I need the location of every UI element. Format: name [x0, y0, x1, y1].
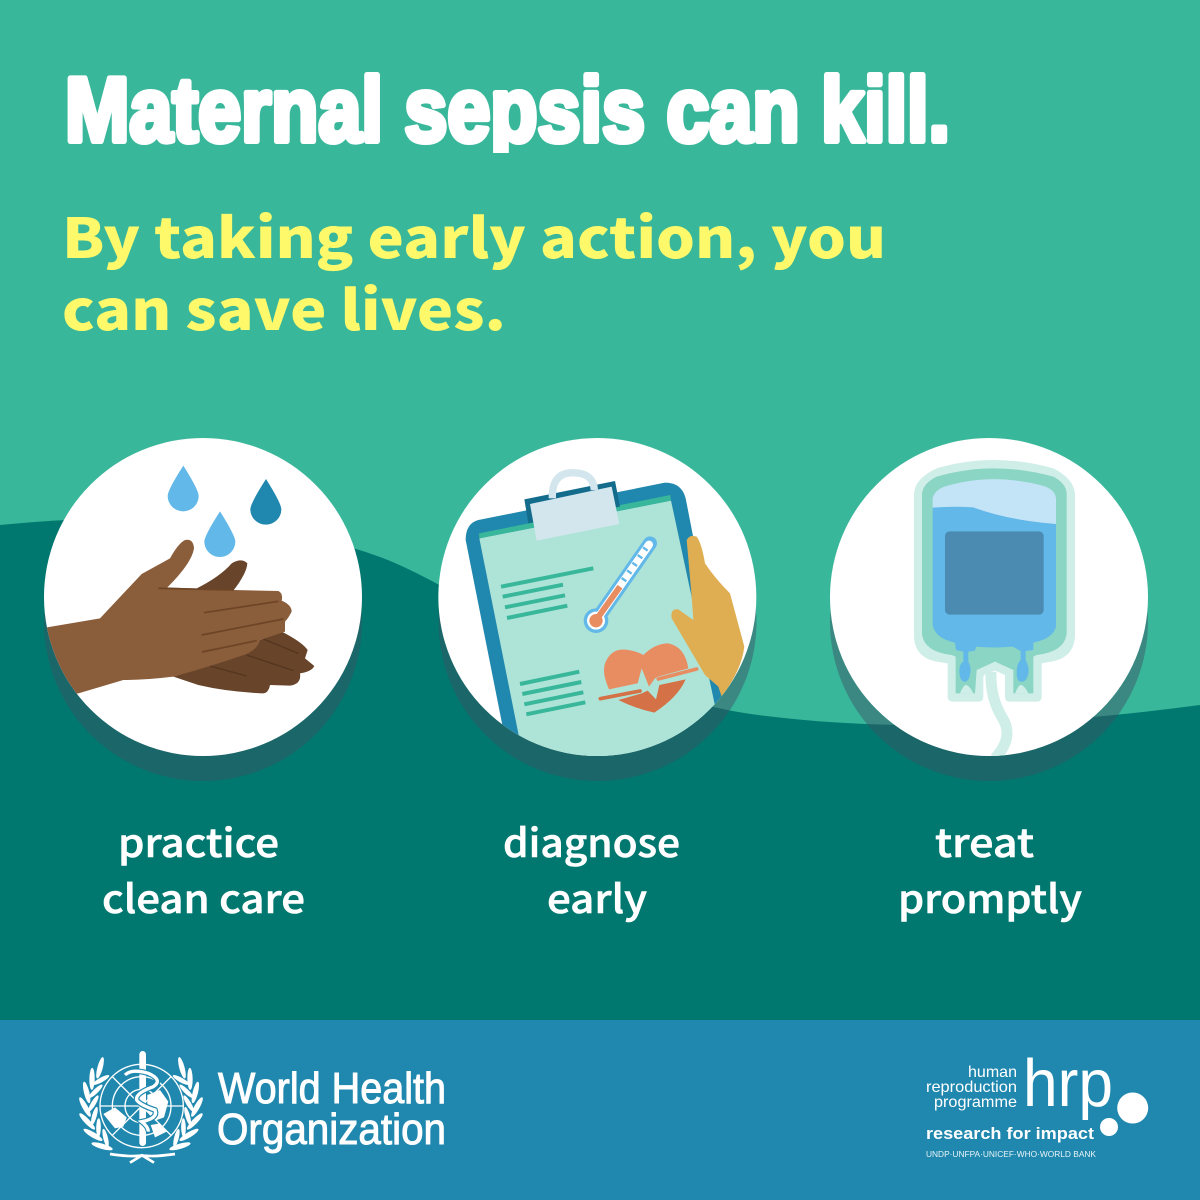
- label: treat promptly: treat: [935, 813, 1034, 869]
- laurel wreath: [77, 1056, 205, 1163]
- icon: washing hands: [43, 540, 314, 697]
- globe: [100, 1064, 183, 1148]
- title: Maternal sepsis can kill.: [65, 60, 950, 161]
- label: diagnose early: early: [547, 869, 647, 925]
- logo text: World Health Organization: [217, 1064, 446, 1154]
- icon: clipboard: [466, 473, 725, 763]
- logo text: World Health Organization: World Health: [218, 1064, 446, 1113]
- logo text: World Health Organization: Organization: [217, 1105, 446, 1154]
- hrp letters: hrp: [1023, 1046, 1113, 1121]
- icon: IV bag: [914, 460, 1075, 702]
- subtitle: [62, 194, 886, 346]
- continents: [103, 1090, 168, 1137]
- circle shadow: clean care: [44, 463, 362, 781]
- label: practice clean care: [102, 813, 305, 925]
- hrp programme name: programme: [934, 1094, 1017, 1111]
- background: dark green wave: [0, 518, 1200, 1020]
- staff and serpent: [125, 1051, 157, 1146]
- hrp programme name: human: [968, 1064, 1017, 1081]
- hrp dots: [1100, 1092, 1148, 1136]
- label: diagnose early: [503, 813, 680, 925]
- partners: UNDP·UNFPA·UNICEF·WHO·WORLD BANK: [926, 1149, 1096, 1159]
- tagline: research for impact: [926, 1124, 1094, 1143]
- label: diagnose early: diagnose: [503, 813, 680, 869]
- icon: heart with pulse: [600, 643, 697, 713]
- hrp programme name: reproduction: [926, 1079, 1017, 1096]
- label: practice clean care: practice: [118, 813, 279, 869]
- panel: practice clean care circle: [43, 438, 362, 756]
- subtitle: can save lives.: [62, 266, 506, 346]
- logo: WHO emblem: [77, 1051, 205, 1163]
- label: practice clean care: clean care: [102, 869, 305, 925]
- icon: hand holding clipboard: [671, 536, 744, 697]
- subtitle: By taking early action, you: [62, 194, 886, 274]
- logo: hrp research for impact: [926, 1046, 1148, 1159]
- icon: water drops: [168, 466, 281, 557]
- hrp programme name: [926, 1064, 1017, 1111]
- circle shadow: treat: [830, 463, 1148, 781]
- panel: treat promptly circle: [830, 438, 1148, 758]
- icon: IV tube: [991, 672, 1007, 758]
- circle shadow: diagnose: [438, 463, 756, 781]
- label: treat promptly: promptly: [898, 869, 1082, 925]
- label: treat promptly: [898, 813, 1082, 925]
- footer band: [0, 1020, 1200, 1200]
- panel: diagnose early circle: [438, 438, 756, 763]
- icon: thermometer: [584, 543, 650, 633]
